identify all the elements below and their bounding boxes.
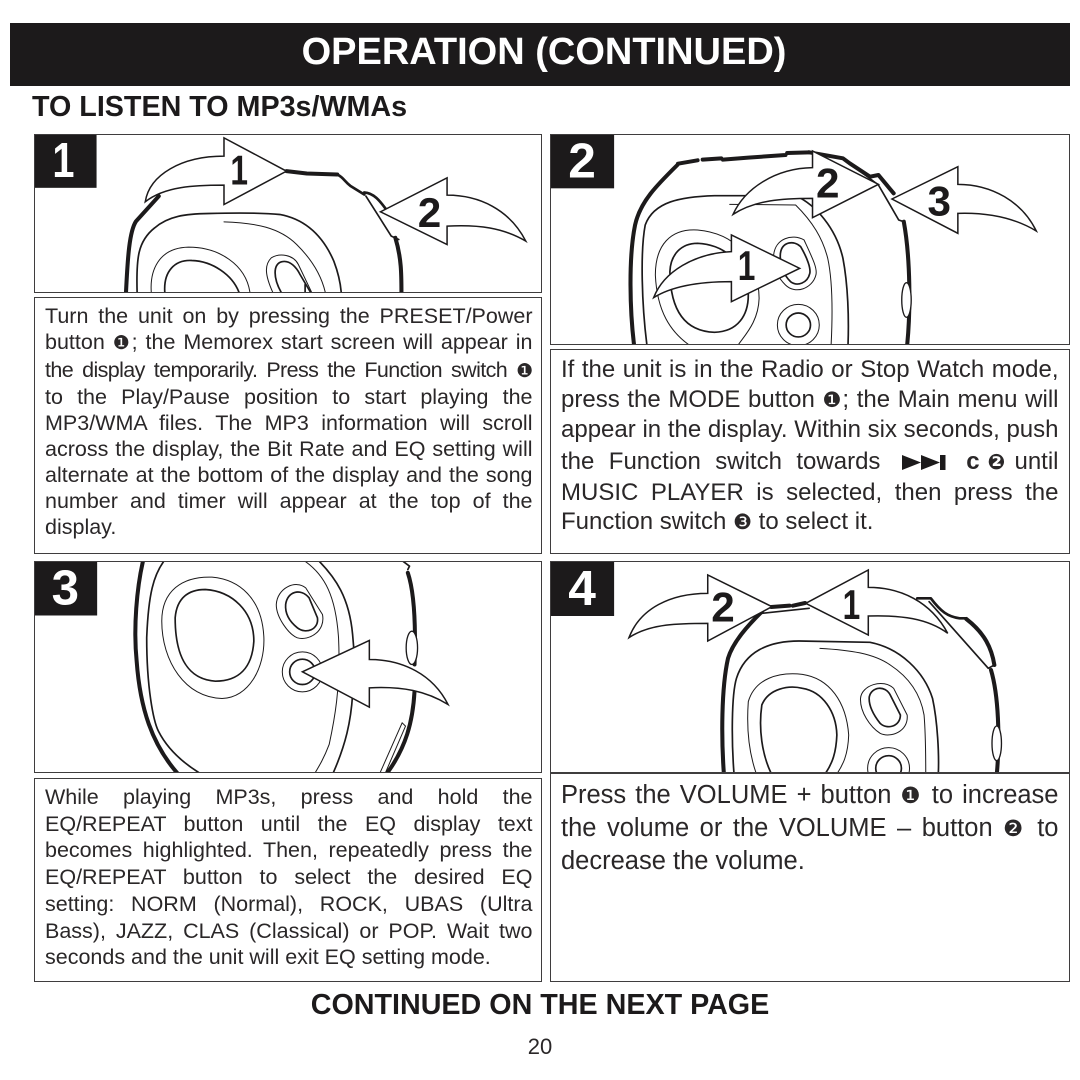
- panel 3: instructions: seconds and the unit will exit EQ setting mode.: [45, 945, 491, 969]
- badge: step 2: 2: [568, 135, 596, 189]
- arrow 1: 1: [738, 242, 755, 289]
- panel 1: instructions: across the display, the Bit Rate and EQ setting will: [45, 437, 532, 461]
- panel 3: instructions: Bass), JAZZ, CLAS (Classical) or POP. Wait two: [45, 919, 532, 943]
- arrow: [302, 640, 448, 707]
- panel 1: instructions: display.: [45, 515, 116, 539]
- panel 1: instructions: number and timer will appear at the top of the: [45, 489, 532, 513]
- continued note: CONTINUED ON THE NEXT PAGE: [311, 989, 769, 1021]
- badge: step 3: [34, 560, 97, 615]
- panel 3: instructions: While playing MP3s, press and hold the: [45, 785, 532, 809]
- panel 1: instructions: alternate at the bottom of the display and the song: [45, 463, 532, 487]
- panel 4: instructions: [550, 772, 1070, 982]
- panel 1: instructions: to the Play/Pause position to start playing the: [45, 385, 532, 409]
- panel 2: illustration: [550, 134, 1070, 345]
- panel 2: instructions: the Function switch towards c❷ until: [561, 448, 1058, 475]
- panel 3: instructions: setting: NORM (Normal), ROCK, UBAS (Ultra: [45, 892, 532, 916]
- badge: step 1: [33, 134, 97, 188]
- badge: step 1: 1: [52, 135, 74, 188]
- panel 4: illustration: [550, 561, 1070, 774]
- title banner: OPERATION (CONTINUED): [302, 31, 786, 73]
- arrow 3: 3: [928, 178, 951, 225]
- arrow 1: [806, 570, 948, 635]
- arrow 1: 1: [843, 581, 860, 628]
- page number: 20: [528, 1034, 552, 1059]
- panel 4: instructions: Press the VOLUME + button ❶ to increase: [561, 781, 1058, 809]
- panel 3: instructions: EQ/REPEAT button to select the desired EQ: [45, 865, 532, 889]
- arrow 2: [733, 151, 878, 218]
- arrow 1: [654, 235, 800, 302]
- panel 3: instructions: [34, 778, 542, 982]
- section heading: TO LISTEN TO MP3s/WMAs: [32, 91, 407, 123]
- badge: step 2: [550, 134, 614, 189]
- panel 3: instructions: becomes highlighted. Then, repeatedly press the: [45, 838, 532, 862]
- title banner: [10, 23, 1070, 86]
- panel 2: instructions: If the unit is in the Radio or Stop Watch mode,: [561, 356, 1058, 383]
- panel 2: instructions: [550, 349, 1070, 554]
- panel 1: instructions: MP3/WMA files. The MP3 information will scroll: [45, 411, 532, 435]
- arrow 1: 1: [230, 146, 248, 193]
- badge: step 4: [550, 560, 614, 616]
- panel 1: instructions: button ❶; the Memorex start screen will appear in: [45, 330, 532, 354]
- panel 2: instructions: MUSIC PLAYER is selected, then press the: [561, 479, 1058, 506]
- panel 1: illustration: [34, 134, 542, 293]
- arrow 2: [629, 575, 772, 641]
- panel 2: instructions: Function switch ❸ to select it.: [561, 508, 873, 535]
- panel 3: illustration: [34, 561, 542, 773]
- arrow 2: 2: [418, 189, 441, 236]
- panel 2: instructions: appear in the display. Within six seconds, push: [561, 416, 1058, 443]
- panel 1: instructions: Turn the unit on by pressing the PRESET/Power: [45, 304, 532, 328]
- panel 4: instructions: decrease the volume.: [561, 847, 805, 875]
- arrow 2: 2: [711, 584, 735, 631]
- panel 1: instructions: the display temporarily. Press the Function switch ❶: [45, 358, 532, 382]
- arrow 2: [380, 178, 526, 244]
- panel 3: instructions: EQ/REPEAT button until the EQ display text: [45, 812, 532, 836]
- panel 1: instructions: [34, 297, 542, 554]
- badge: step 3: 3: [52, 562, 79, 615]
- arrow 1: [145, 138, 287, 204]
- badge: step 4: 4: [568, 562, 596, 616]
- panel 4: instructions: the volume or the VOLUME – button ❷ to: [561, 814, 1058, 842]
- arrow 3: [892, 167, 1036, 233]
- arrow 2: 2: [816, 160, 839, 207]
- panel 2: instructions: press the MODE button ❶; the Main menu will: [561, 386, 1058, 413]
